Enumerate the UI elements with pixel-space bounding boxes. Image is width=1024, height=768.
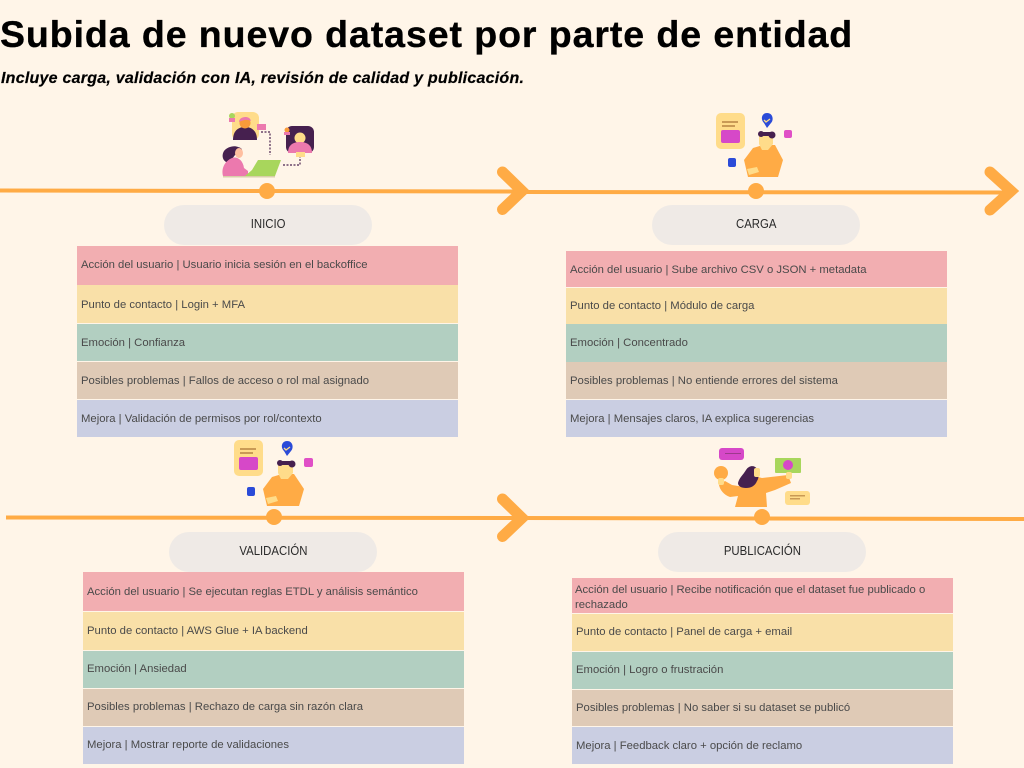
icon: person holding money bbox=[714, 448, 810, 507]
panel: validación bbox=[83, 572, 464, 764]
label: validación: VALIDACIÓN bbox=[239, 544, 307, 558]
panel: validación: Acción del usuario | Se ejecutan reglas ETDL y análisis semántico bbox=[87, 586, 418, 598]
panel: publicación: Mejora | Feedback claro + opción de reclamo bbox=[576, 740, 802, 752]
panel: inicio: Emoción | Confianza bbox=[81, 337, 185, 349]
panel: carga: Mejora | Mensajes claros, IA explica sugerencias bbox=[570, 413, 814, 425]
panel: inicio: Acción del usuario | Usuario inicia sesión en el backoffice bbox=[81, 259, 368, 271]
panel: validación: Punto de contacto | AWS Glue + IA backend bbox=[87, 624, 308, 636]
subtitle: Incluye carga, validación con IA, revisión de calidad y publicación. bbox=[1, 70, 524, 87]
label: carga bbox=[652, 205, 860, 245]
panel: inicio: Mejora | Validación de permisos por rol/contexto bbox=[81, 413, 322, 425]
panel: publicación: Posibles problemas | No saber si su dataset se publicó bbox=[576, 702, 850, 714]
label: validación bbox=[169, 532, 377, 572]
panel: inicio: Posibles problemas | Fallos de acceso o rol mal asignado bbox=[81, 375, 369, 387]
timeline: bottom row bbox=[6, 494, 1024, 542]
panel: publicación: Punto de contacto | Panel de carga + email bbox=[576, 626, 792, 638]
panel: carga: Punto de contacto | Módulo de carga bbox=[570, 300, 754, 312]
label: publicación: PUBLICACIÓN bbox=[723, 544, 801, 558]
title: Subida de nuevo dataset por parte de entidad bbox=[0, 13, 853, 55]
panel: validación: Emoción | Ansiedad bbox=[87, 663, 187, 675]
panel: inicio: Punto de contacto | Login + MFA bbox=[81, 298, 245, 310]
panel: validación: Posibles problemas | Rechazo de carga sin razón clara bbox=[87, 701, 363, 713]
panel: publicación: Emoción | Logro o frustración bbox=[576, 664, 723, 676]
label: inicio: INICIO bbox=[251, 217, 285, 231]
icon: people connected online bbox=[222, 112, 314, 178]
panel: validación: Mejora | Mostrar reporte de validaciones bbox=[87, 739, 289, 751]
timeline: top row bbox=[0, 166, 1020, 216]
panel: carga: Posibles problemas | No entiende errores del sistema bbox=[570, 375, 838, 387]
panel: inicio bbox=[77, 246, 458, 437]
panel: publicación bbox=[572, 578, 953, 764]
panel: carga: Emoción | Concentrado bbox=[570, 336, 688, 348]
panel: carga bbox=[566, 251, 947, 437]
panel: carga: Acción del usuario | Sube archivo CSV o JSON + metadata bbox=[570, 264, 866, 276]
icon: person validating data bbox=[234, 440, 313, 506]
label: inicio bbox=[164, 205, 372, 245]
label: carga: CARGA bbox=[736, 217, 776, 231]
icon: person reviewing upload bbox=[716, 113, 792, 177]
label: publicación bbox=[658, 532, 866, 572]
panel: publicación: Acción del usuario | Recibe notificación que el dataset fue publicado o rechazado bbox=[575, 584, 925, 610]
